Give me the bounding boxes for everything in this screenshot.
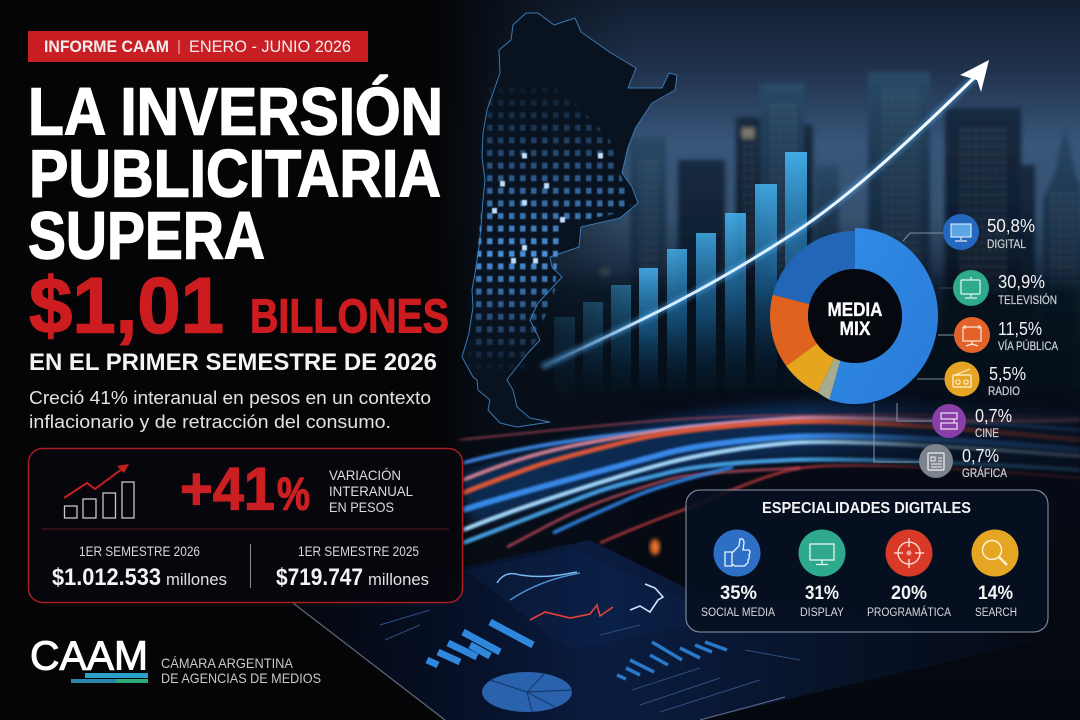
- logo: CAAM: [30, 632, 321, 686]
- legend: via publica: VÍA PÚBLICA: [998, 340, 1058, 353]
- logo caption: [161, 655, 321, 686]
- logo: CAAM: CAAM: [30, 632, 148, 678]
- title: LA INVERSIÓN: [28, 74, 443, 150]
- display: 31%: [805, 583, 839, 604]
- panel heading: ESPECIALIDADES DIGITALES: [762, 500, 971, 517]
- programatica: [867, 530, 951, 619]
- stat caption: VARIACIÓN: [329, 467, 401, 483]
- legend: radio: 5,5%: [989, 364, 1026, 384]
- legend: digital: 50,8%: [987, 216, 1035, 236]
- legend: cine: 0,7%: [975, 406, 1012, 426]
- stat: +41%: +41: [180, 456, 275, 522]
- rising bar chart: [554, 152, 807, 407]
- donut center label: MEDIA: [828, 300, 883, 321]
- legend: digital: [943, 214, 1035, 251]
- orange glow on tablet: [650, 539, 660, 555]
- headline amount: $1,01: [29, 260, 224, 350]
- comparison: 2025: millones: [368, 570, 429, 589]
- subtitle: EN EL PRIMER SEMESTRE DE 2026: [29, 349, 437, 376]
- badge: informe: ENERO - JUNIO 2026: [189, 37, 351, 56]
- comparison: 2025: $719.747: [276, 564, 363, 591]
- legend: radio: [944, 362, 1026, 398]
- comparison: 2025: 1ER SEMESTRE 2025: [298, 543, 419, 559]
- legend: television: TELEVISIÓN: [998, 294, 1057, 307]
- intro text: Creció 41% interanual en pesos en un contexto: [29, 387, 431, 408]
- title: SUPERA: [28, 198, 265, 274]
- donut center label: MIX: [840, 319, 871, 340]
- map of Argentina: [462, 13, 677, 427]
- search: SEARCH: [975, 607, 1017, 619]
- legend: cine: [932, 404, 1012, 440]
- legend: grafica: 0,7%: [962, 446, 999, 466]
- legend: television: [953, 270, 1057, 307]
- tablet with dashboards: [293, 540, 1040, 720]
- light streaks: [457, 415, 1080, 547]
- programatica: PROGRAMÁTICA: [867, 606, 951, 619]
- title: [28, 74, 443, 274]
- title: PUBLICITARIA: [29, 136, 441, 212]
- comparison: 2026: millones: [166, 570, 227, 589]
- stat caption: [329, 467, 413, 515]
- logo caption: DE AGENCIAS DE MEDIOS: [161, 670, 321, 686]
- legend: digital: DIGITAL: [987, 239, 1027, 251]
- legend: radio: RADIO: [988, 386, 1020, 398]
- badge: informe: INFORME CAAM: [44, 37, 169, 56]
- intro text: [29, 387, 431, 432]
- panel: variacion interanual: [28, 448, 462, 602]
- legend: grafica: GRÁFICA: [962, 467, 1007, 480]
- search: 14%: [978, 583, 1013, 604]
- panel: especialidades digitales: [686, 490, 1048, 632]
- stat: +41%: %: [277, 468, 310, 520]
- bottom haze over city: [440, 280, 1080, 390]
- growth arrow: [542, 60, 989, 367]
- icon: growth chart: [64, 464, 134, 518]
- programatica: 20%: [891, 583, 927, 604]
- logo caption: CÁMARA ARGENTINA: [161, 655, 294, 671]
- city skyline: [600, 72, 1080, 340]
- donut center label: [828, 300, 883, 340]
- search: [972, 530, 1018, 619]
- left fade: [440, 0, 640, 720]
- comparison: 2026: 1ER SEMESTRE 2026: [79, 543, 200, 559]
- legend: grafica: [919, 444, 1007, 480]
- map data dots: [468, 75, 632, 370]
- legend: via publica: 11,5%: [998, 319, 1042, 339]
- headline amount: [29, 260, 449, 350]
- social media: [701, 530, 775, 619]
- social media: 35%: [720, 583, 757, 604]
- headline amount: BILLONES: [250, 290, 449, 344]
- stat caption: EN PESOS: [329, 499, 394, 515]
- comparison: 2026: [52, 543, 227, 591]
- legend: via publica: [954, 317, 1058, 353]
- donut chart: media mix: [770, 228, 938, 404]
- legend: cine: CINE: [975, 428, 999, 440]
- badge: informe: [28, 31, 368, 62]
- legend connectors: [874, 233, 954, 462]
- comparison: 2025: [276, 543, 429, 591]
- display: [798, 530, 846, 619]
- display: DISPLAY: [800, 607, 844, 619]
- intro text: inflacionario y de retracción del consumo.: [29, 411, 391, 432]
- social media: SOCIAL MEDIA: [701, 607, 775, 619]
- comparison: 2026: $1.012.533: [52, 564, 161, 591]
- stat caption: INTERANUAL: [329, 483, 413, 499]
- legend: television: 30,9%: [998, 272, 1045, 292]
